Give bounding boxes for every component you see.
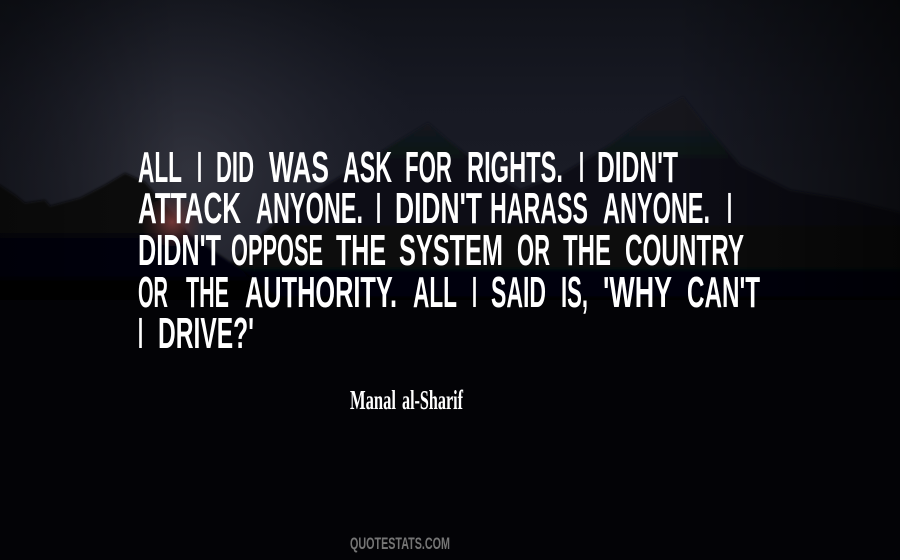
- quote line 1: [138, 144, 678, 192]
- quote line 3: DIDN'T: [138, 227, 221, 275]
- quote line 4: I: [472, 269, 477, 317]
- quote line 1: RIGHTS.: [467, 144, 563, 192]
- author name: al-Sharif: [402, 385, 464, 415]
- quote line 1: FOR: [405, 144, 452, 192]
- quote line 2: HARASS: [490, 185, 588, 233]
- quote line 4: 'WHY: [603, 269, 672, 317]
- quote line 4: CAN'T: [687, 269, 760, 317]
- quote line 2: [138, 185, 732, 233]
- quote line 1: I: [579, 144, 584, 192]
- quote line 2: DIDN'T: [395, 185, 482, 233]
- quote line 1: I: [197, 144, 202, 192]
- quote line 5: [138, 310, 254, 358]
- quote line 4: OR: [138, 269, 168, 317]
- quote line 4: ALL: [413, 269, 457, 317]
- quote line 2: ANYONE.: [603, 185, 710, 233]
- quote line 5: I: [138, 310, 143, 358]
- quote line 1: DIDN'T: [597, 144, 678, 192]
- quote line 2: ATTACK: [138, 185, 241, 233]
- quote line 3: THE: [563, 227, 611, 275]
- quote text: [138, 144, 760, 358]
- quote line 2: ANYONE.: [256, 185, 363, 233]
- quote line 4: [138, 269, 760, 317]
- background: edge vignette: [0, 0, 900, 300]
- quote line 4: IS,: [561, 269, 588, 317]
- quote line 3: THE: [336, 227, 386, 275]
- quote line 1: DID: [216, 144, 254, 192]
- quote line 2: I: [376, 185, 381, 233]
- quote text: I: [727, 185, 732, 233]
- site credit: QUOTESTATS.COM: [350, 535, 450, 553]
- quote line 3: SYSTEM: [399, 227, 503, 275]
- quote line 4: SAID: [491, 269, 546, 317]
- quote line 5: DRIVE?': [158, 310, 254, 358]
- quote line 3: [138, 227, 744, 275]
- author name: [350, 385, 464, 415]
- background: night sky: [0, 0, 900, 400]
- quote line 4: AUTHORITY.: [245, 269, 397, 317]
- quote line 3: OR: [517, 227, 550, 275]
- quote line 3: OPPOSE: [231, 227, 323, 275]
- quote line 1: ASK: [343, 144, 392, 192]
- quote line 1: WAS: [269, 144, 329, 192]
- quote line 1: ALL: [138, 144, 182, 192]
- quote line 3: COUNTRY: [625, 227, 744, 275]
- author name: Manal: [350, 385, 396, 415]
- quote line 4: THE: [186, 269, 229, 317]
